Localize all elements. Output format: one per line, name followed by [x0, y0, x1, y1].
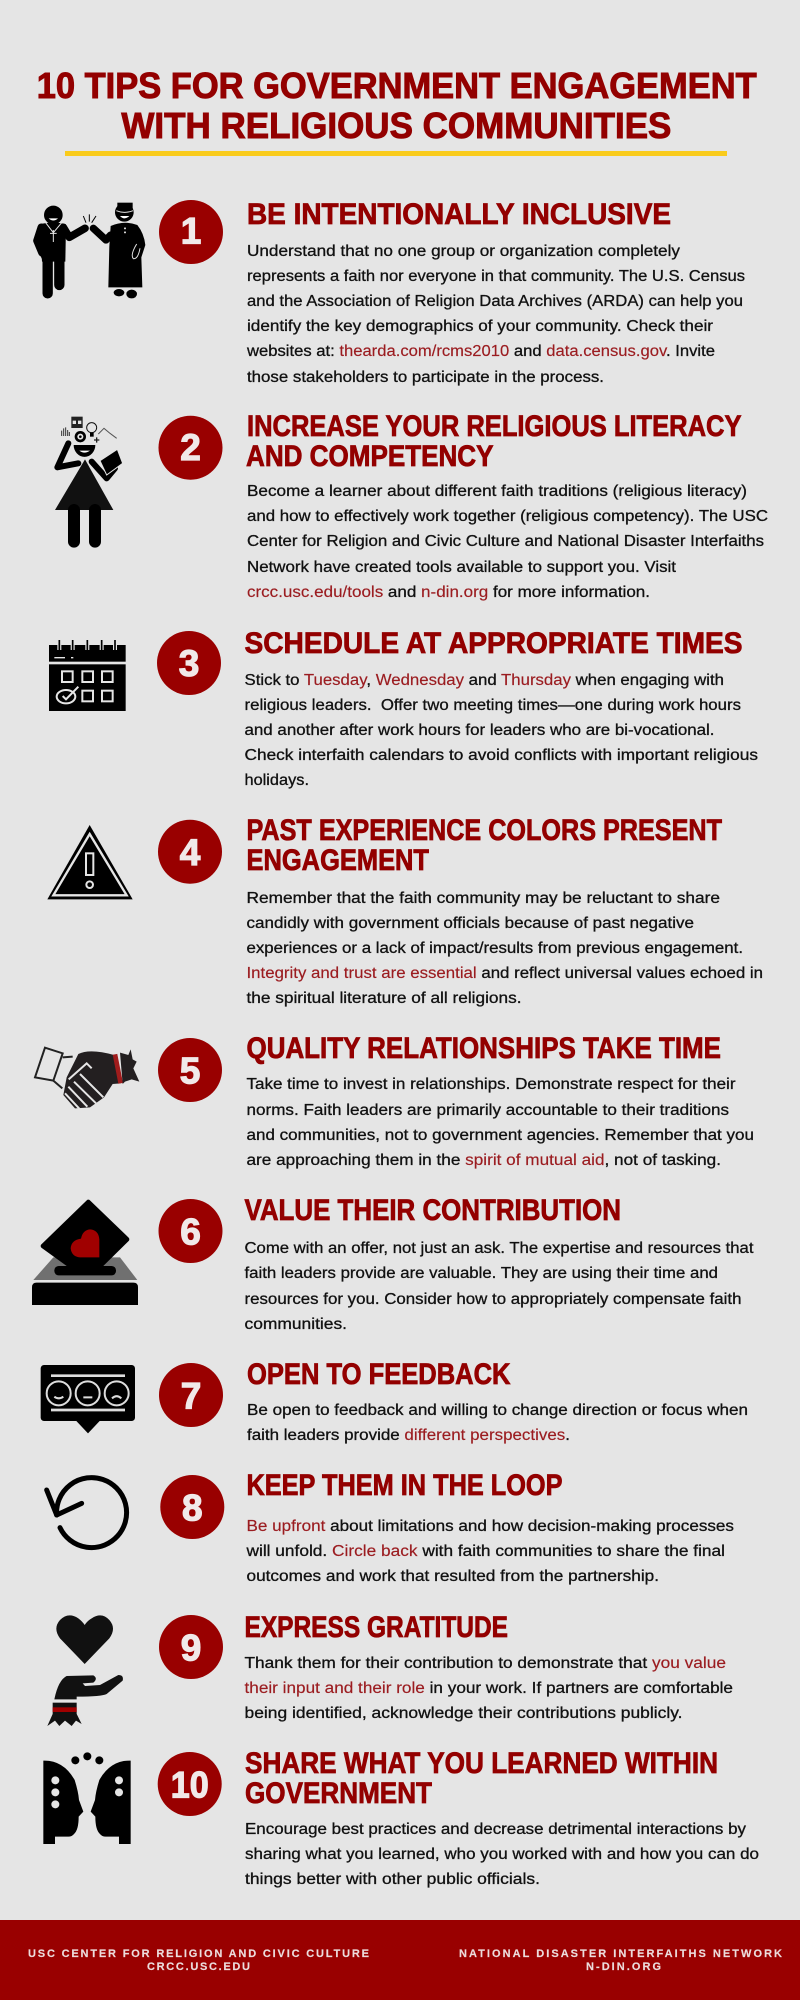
footer: N-DIN credit — [459, 1948, 782, 1973]
badge: 3 — [157, 631, 221, 695]
body text: Understand that no one group or organization completely — [247, 243, 680, 260]
body text: things better with other public officials. — [245, 1871, 540, 1888]
panel: tip 10 — [43, 1747, 759, 1888]
body text: Be upfront about limitations and how decision-making processes — [246, 1518, 734, 1535]
body text — [245, 1518, 734, 1585]
body text: their input and their role in your work. If partners are comfortable — [244, 1680, 733, 1697]
body text: being identified, acknowledge their contributions publicly. — [244, 1705, 682, 1722]
icon: circular return arrow — [47, 1478, 127, 1548]
panel: tip 1 — [37, 198, 745, 386]
body text: Integrity and trust are essential and reflect universal values echoed in — [246, 965, 763, 982]
body text: faith leaders provide are valuable. They are using their time and — [244, 1265, 718, 1282]
heading: PAST EXPERIENCE COLORS PRESENT — [246, 814, 722, 847]
body text: will unfold. Circle back with faith communities to share the final — [245, 1543, 725, 1560]
body text: and another after work hours for leaders who are bi-vocational. — [244, 722, 714, 739]
body text: websites at: thearda.com/rcms2010 and data.census.gov . Invite — [246, 343, 715, 360]
badge: 1: 1 — [181, 210, 201, 252]
badge: 6: 6 — [180, 1212, 201, 1252]
panel: tip 6 — [32, 1194, 754, 1333]
body text: candidly with government officials because of past negative — [246, 915, 694, 932]
yellow title rule — [65, 151, 727, 156]
icon: clergy fist bump — [37, 203, 145, 298]
body text — [246, 243, 745, 386]
body text: Stick to Tuesday , Wednesday and Thursday when engaging with — [244, 672, 724, 689]
badge: 6 — [158, 1199, 222, 1263]
body text — [246, 890, 763, 1007]
badge: 8 — [160, 1475, 224, 1539]
body text: those stakeholders to participate in the process. — [247, 369, 604, 386]
panel: tip 8 — [47, 1469, 734, 1585]
title: WITH RELIGIOUS COMMUNITIES — [121, 105, 671, 146]
badge: 5: 5 — [180, 1050, 200, 1092]
body text: norms. Faith leaders are primarily accountable to their traditions — [246, 1102, 729, 1119]
panel: tip 9 — [47, 1611, 733, 1726]
heading: BE INTENTIONALLY INCLUSIVE — [247, 198, 671, 231]
heading: KEEP THEM IN THE LOOP — [246, 1469, 562, 1502]
title: 10 TIPS FOR GOVERNMENT ENGAGEMENT — [37, 65, 757, 106]
body text: Thank them for their contribution to demonstrate that you value — [244, 1655, 726, 1672]
title — [37, 65, 757, 146]
footer band — [0, 1920, 800, 2000]
footer: USC center credit: USC CENTER FOR RELIGION AND CIVIC CULTURE — [28, 1948, 369, 1960]
heading: SCHEDULE AT APPROPRIATE TIMES — [244, 627, 742, 660]
body text: Network have created tools available to support you. Visit — [247, 559, 677, 576]
heading: SHARE WHAT YOU LEARNED WITHIN — [245, 1747, 718, 1780]
body text: the spiritual literature of all religions. — [246, 990, 522, 1007]
body text: Remember that the faith community may be reluctant to share — [246, 890, 720, 907]
heading: OPEN TO FEEDBACK — [247, 1358, 511, 1391]
body text: holidays. — [244, 772, 309, 789]
body text: and the Association of Religion Data Archives (ARDA) can help you — [247, 293, 743, 310]
body text: faith leaders provide different perspectives . — [247, 1427, 570, 1444]
badge: 5 — [158, 1038, 222, 1102]
body text: religious leaders. Offer two meeting times—one during work hours — [244, 697, 741, 714]
badge: 7: 7 — [181, 1376, 201, 1416]
body text: communities. — [244, 1316, 347, 1333]
badge: 2 — [158, 416, 222, 480]
icon: woman thinking with book — [55, 417, 123, 542]
heading — [246, 410, 742, 473]
body text: Center for Religion and Civic Culture and National Disaster Interfaiths — [247, 533, 764, 550]
panel: tip 2 — [55, 410, 768, 601]
heading — [246, 814, 722, 877]
body text: resources for you. Consider how to appropriately compensate faith — [244, 1291, 742, 1308]
heading: ENGAGEMENT — [246, 844, 429, 877]
footer: USC center credit: CRCC.USC.EDU — [147, 1961, 250, 1973]
panel: tip 3 — [49, 627, 758, 789]
body text: Be open to feedback and willing to change direction or focus when — [247, 1402, 748, 1419]
body text: Encourage best practices and decrease detrimental interactions by — [245, 1821, 746, 1838]
footer: USC center credit — [28, 1948, 369, 1973]
badge: 9 — [159, 1615, 223, 1679]
panel: tip 7 — [41, 1358, 748, 1444]
heading: GOVERNMENT — [245, 1777, 432, 1810]
badge: 4: 4 — [180, 832, 201, 873]
icon: handshake — [35, 1048, 139, 1109]
body text: and communities, not to government agencies. Remember that you — [246, 1127, 754, 1144]
body text: experiences or a lack of impact/results from previous engagement. — [246, 940, 743, 957]
body text: Check interfaith calendars to avoid conflicts with important religious — [244, 747, 758, 764]
body text: outcomes and work that resulted from the partnership. — [246, 1568, 659, 1585]
body text — [244, 672, 758, 789]
badge: 10: 10 — [171, 1764, 209, 1806]
heading: AND COMPETENCY — [246, 440, 494, 473]
icon: feedback speech bubble — [41, 1365, 135, 1433]
body text: are approaching them in the spirit of mutual aid , not of tasking. — [246, 1152, 721, 1169]
footer: N-DIN credit: NATIONAL DISASTER INTERFAITHS NETWORK — [459, 1948, 782, 1960]
body text: identify the key demographics of your community. Check their — [247, 318, 713, 335]
badge: 9: 9 — [181, 1628, 201, 1668]
badge: 1 — [159, 200, 223, 264]
icon: two heads facing — [43, 1752, 131, 1844]
heading — [245, 1747, 718, 1810]
badge: 7 — [159, 1363, 223, 1427]
badge: 2: 2 — [180, 427, 201, 468]
body text — [244, 1655, 733, 1722]
icon: calendar — [49, 640, 126, 711]
body text — [245, 1821, 759, 1888]
panel: tip 4 — [47, 814, 763, 1007]
footer: N-DIN credit: N-DIN.ORG — [586, 1961, 661, 1973]
body text: Take time to invest in relationships. Demonstrate respect for their — [246, 1076, 736, 1093]
heading: VALUE THEIR CONTRIBUTION — [244, 1194, 621, 1227]
body text: crcc.usc.edu/tools and n-din.org for more information. — [247, 584, 650, 601]
panel: tip 5 — [35, 1032, 754, 1169]
badge: 10 — [158, 1752, 222, 1816]
icon: hand holding heart — [47, 1615, 123, 1726]
icon: warning triangle — [47, 825, 133, 899]
body text: represents a faith nor everyone in that community. The U.S. Census — [247, 268, 745, 285]
heading: QUALITY RELATIONSHIPS TAKE TIME — [246, 1032, 721, 1065]
body text: Become a learner about different faith traditions (religious literacy) — [247, 483, 747, 500]
body text: and how to effectively work together (religious competency). The USC — [247, 508, 768, 525]
body text — [247, 1402, 748, 1444]
heading: EXPRESS GRATITUDE — [244, 1611, 508, 1644]
icon: ballot box with heart — [32, 1202, 138, 1305]
body text: sharing what you learned, who you worked with and how you can do — [245, 1846, 759, 1863]
body text — [244, 1240, 754, 1333]
body text — [247, 483, 768, 601]
body text — [246, 1076, 754, 1169]
body text: Come with an offer, not just an ask. The expertise and resources that — [244, 1240, 754, 1257]
badge: 4 — [158, 820, 222, 884]
badge: 3: 3 — [179, 643, 199, 684]
badge: 8: 8 — [182, 1488, 203, 1528]
